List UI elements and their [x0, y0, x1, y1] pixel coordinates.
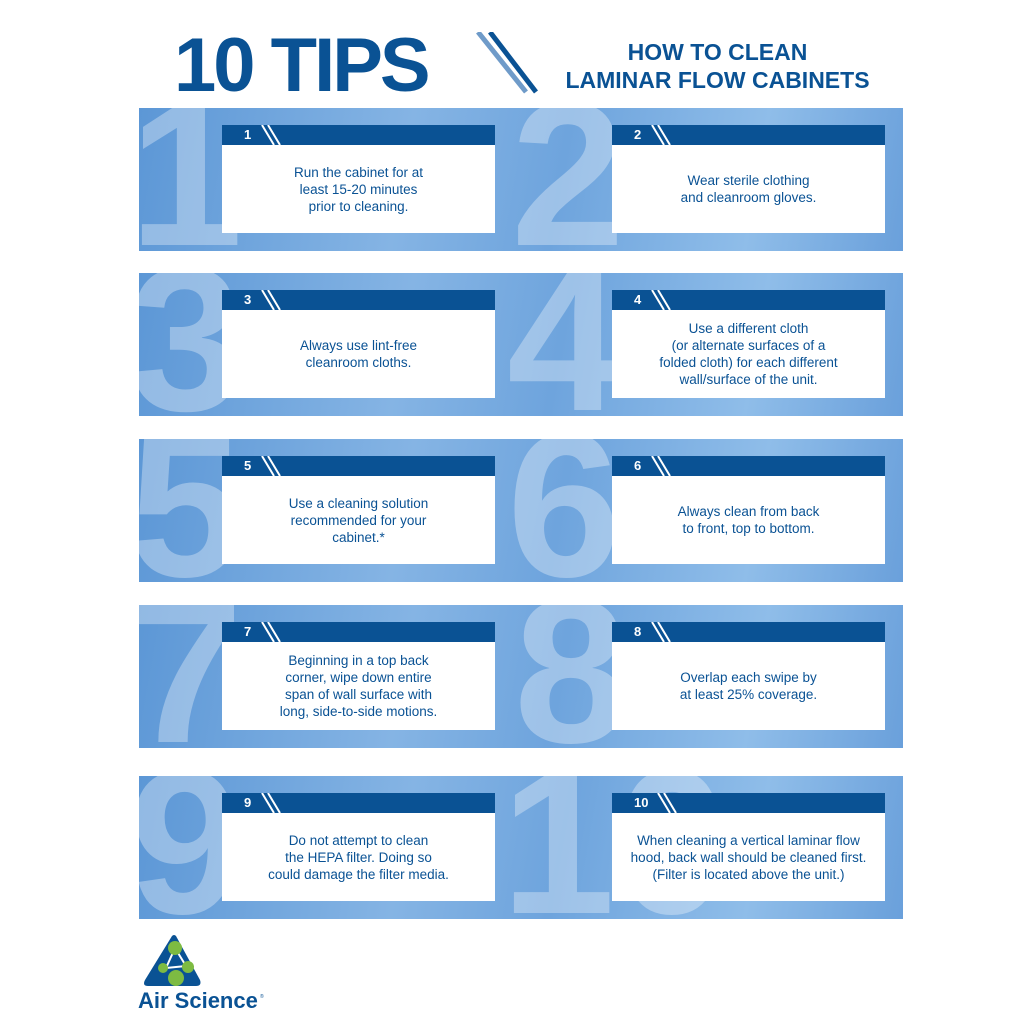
card: tip 3: 3	[244, 292, 251, 307]
card: tip 5: 5	[244, 458, 251, 473]
card: tip 3: Always use lint-free	[300, 338, 417, 353]
card: tip 4: wall/surface of the unit.	[679, 372, 818, 387]
card: tip 2: and cleanroom gloves.	[681, 190, 816, 205]
panel: tips 7-8	[139, 605, 903, 748]
card: tip 7: corner, wipe down entire	[285, 670, 432, 685]
card: tip 4: Use a different cloth	[689, 321, 808, 336]
icon: title slashes	[476, 32, 538, 94]
logo: Air Science: ®	[260, 993, 264, 1000]
panel: tips 9-10	[139, 776, 903, 919]
card: tip 6	[612, 456, 885, 564]
card: tip 7: long, side-to-side motions.	[280, 704, 437, 719]
card: tip 10: (Filter is located above the unit.)	[652, 866, 845, 882]
card: tip 5: recommended for your	[291, 512, 426, 528]
title: 10 TIPS	[174, 23, 428, 108]
card: tip 10: When cleaning a vertical laminar flow	[637, 832, 860, 848]
card: tip 7: 7	[244, 624, 251, 639]
card: tip 1: Run the cabinet for at	[294, 164, 423, 180]
card: tip 2	[612, 125, 885, 233]
card: tip 6: to front, top to bottom.	[682, 521, 815, 536]
card: tip 7	[222, 622, 495, 730]
card: tip 4: 4	[634, 292, 641, 307]
card: tip 1: prior to cleaning.	[309, 198, 408, 214]
card: tip 8: 8	[634, 624, 641, 639]
card: tip 6: Always clean from back	[678, 504, 819, 519]
card: tip 3	[222, 290, 495, 398]
subtitle: LAMINAR FLOW CABINETS	[565, 67, 870, 93]
card: tip 1	[222, 125, 495, 233]
panel: tips 5-6	[139, 439, 903, 582]
card: tip 10: 10	[634, 795, 648, 810]
card: tip 4: folded cloth) for each different	[659, 355, 838, 370]
card: tip 5: Use a cleaning solution	[289, 496, 428, 510]
card: tip 5: cabinet.*	[332, 530, 385, 544]
card: tip 4: (or alternate surfaces of a	[672, 338, 825, 353]
logo: Air Science	[138, 935, 264, 1012]
card: tip 5	[222, 456, 495, 564]
card: tip 9: could damage the filter media.	[268, 866, 449, 882]
card: tip 3: cleanroom cloths.	[306, 355, 411, 370]
subtitle: HOW TO CLEAN	[628, 39, 807, 65]
subtitle	[565, 39, 870, 93]
card: tip 9	[222, 793, 495, 901]
card: tip 8: at least 25% coverage.	[680, 687, 817, 702]
panel: tips 3-4	[139, 273, 903, 416]
card: tip 4	[612, 290, 885, 398]
card: tip 2: Wear sterile clothing	[687, 173, 810, 188]
card: tip 9: Do not attempt to clean	[289, 832, 428, 848]
card: tip 7: Beginning in a top back	[288, 653, 429, 668]
card: tip 9: 9	[244, 795, 251, 810]
card: tip 10: hood, back wall should be cleaned first.	[631, 850, 866, 864]
card: tip 9: the HEPA filter. Doing so	[285, 850, 432, 864]
card: tip 10	[612, 793, 885, 901]
card: tip 8: Overlap each swipe by	[680, 670, 817, 685]
panel: tips 1-2	[139, 108, 903, 251]
card: tip 7: span of wall surface with	[285, 687, 432, 702]
card: tip 1: 1	[244, 127, 251, 142]
card: tip 2: 2	[634, 127, 641, 142]
card: tip 8	[612, 622, 885, 730]
card: tip 6: 6	[634, 458, 641, 473]
card: tip 1: least 15-20 minutes	[300, 182, 417, 196]
